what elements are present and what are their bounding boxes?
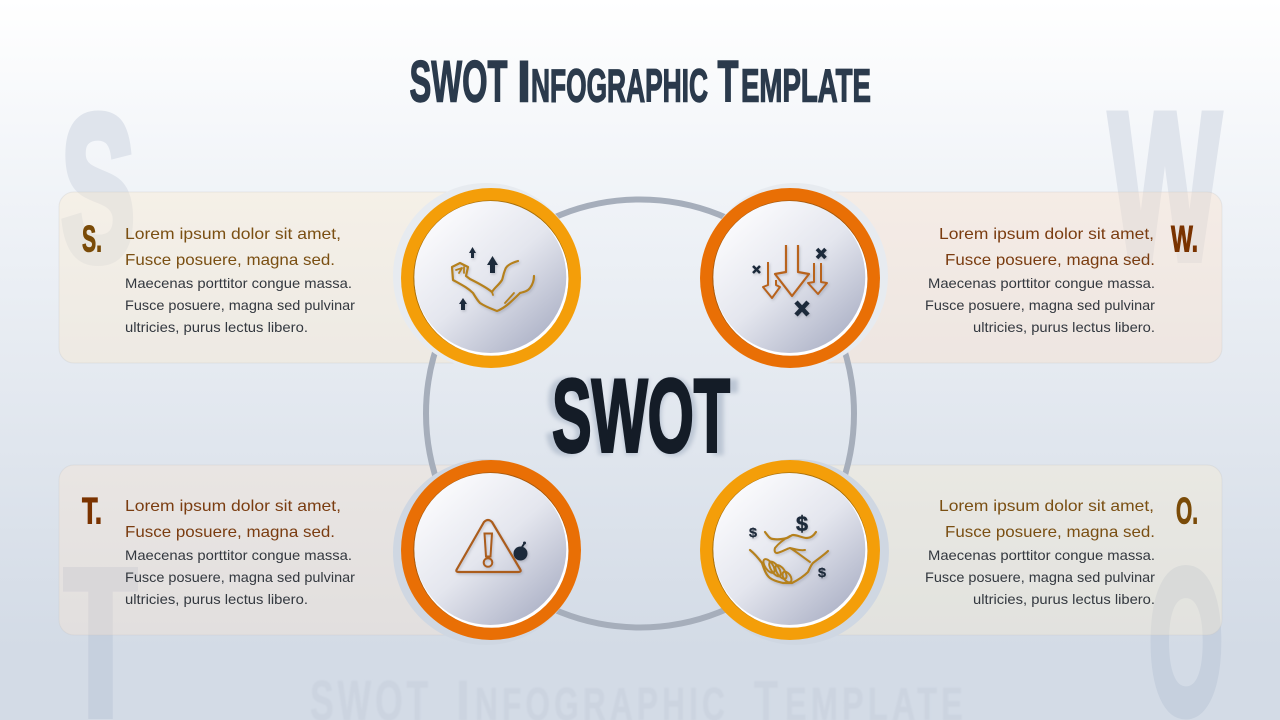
block: S text: Fusce posuere, magna sed. bbox=[125, 252, 335, 269]
panel: threats card bbox=[59, 465, 480, 635]
block: W text: Fusce posuere, magna sed. bbox=[945, 252, 1155, 269]
block: W text bbox=[925, 218, 1198, 335]
block: T text: T. bbox=[82, 490, 102, 532]
title: SWOT bbox=[410, 49, 508, 114]
badge: opportunities bbox=[700, 459, 889, 645]
block: W text: ultricies, purus lectus libero. bbox=[973, 319, 1155, 335]
icon: flexed arm bbox=[452, 247, 534, 311]
block: O text: Lorem ipsum dolor sit amet, bbox=[939, 498, 1154, 515]
title bbox=[410, 49, 871, 114]
center label: SWOT bbox=[545, 356, 738, 477]
block: O text: ultricies, purus lectus libero. bbox=[973, 591, 1155, 607]
badge: strengths bbox=[393, 183, 581, 369]
block: T text: Maecenas porttitor congue massa. bbox=[125, 547, 352, 563]
icon: handshake with dollars: $ bbox=[749, 525, 758, 540]
icon: handshake with dollars: $ bbox=[796, 513, 808, 536]
block: O text bbox=[925, 490, 1198, 607]
panel: strengths card bbox=[59, 192, 480, 363]
block: T text bbox=[82, 490, 355, 607]
ghost letter S: S bbox=[61, 72, 135, 304]
icon: warning triangle with bomb bbox=[456, 520, 528, 572]
title: EMPLATE bbox=[741, 59, 871, 111]
block: W text: W. bbox=[1171, 218, 1198, 260]
title: T bbox=[718, 49, 738, 114]
panel: opportunities card bbox=[801, 465, 1222, 635]
center label: SWOT: SWOT bbox=[545, 356, 738, 477]
title: NFOGRAPHIC bbox=[531, 59, 708, 111]
block: T text: ultricies, purus lectus libero. bbox=[125, 591, 308, 607]
block: T text: Fusce posuere, magna sed. bbox=[125, 524, 335, 541]
block: W text: Lorem ipsum dolor sit amet, bbox=[939, 226, 1154, 243]
block: T text: Lorem ipsum dolor sit amet, bbox=[125, 498, 341, 515]
block: W text: Maecenas porttitor congue massa. bbox=[928, 275, 1155, 291]
ghost title bbox=[310, 669, 967, 720]
panel: weaknesses card bbox=[801, 192, 1222, 363]
block: S text: Maecenas porttitor congue massa. bbox=[125, 275, 352, 291]
block: S text: S. bbox=[82, 218, 102, 260]
icon: handshake with dollars bbox=[749, 513, 828, 584]
icon: handshake with dollars: $ bbox=[818, 565, 827, 580]
block: S text: ultricies, purus lectus libero. bbox=[125, 319, 308, 335]
block: S text: Lorem ipsum dolor sit amet, bbox=[125, 226, 341, 243]
block: S text: Fusce posuere, magna sed pulvinar bbox=[125, 297, 355, 313]
block: O text: Fusce posuere, magna sed. bbox=[945, 524, 1155, 541]
block: T text: Fusce posuere, magna sed pulvinar bbox=[125, 569, 355, 585]
central ring bbox=[426, 200, 854, 628]
block: S text bbox=[82, 218, 355, 335]
badge: weaknesses bbox=[700, 183, 888, 369]
block: O text: Maecenas porttitor congue massa. bbox=[928, 547, 1155, 563]
block: W text: Fusce posuere, magna sed pulvinar bbox=[925, 297, 1155, 313]
icon: falling arrows bbox=[753, 245, 827, 315]
title: I bbox=[517, 49, 531, 114]
badge: threats bbox=[393, 459, 581, 645]
block: O text: Fusce posuere, magna sed pulvinar bbox=[925, 569, 1155, 585]
center label: SWOT: SWOT bbox=[552, 358, 730, 474]
block: O text: O. bbox=[1176, 490, 1198, 532]
